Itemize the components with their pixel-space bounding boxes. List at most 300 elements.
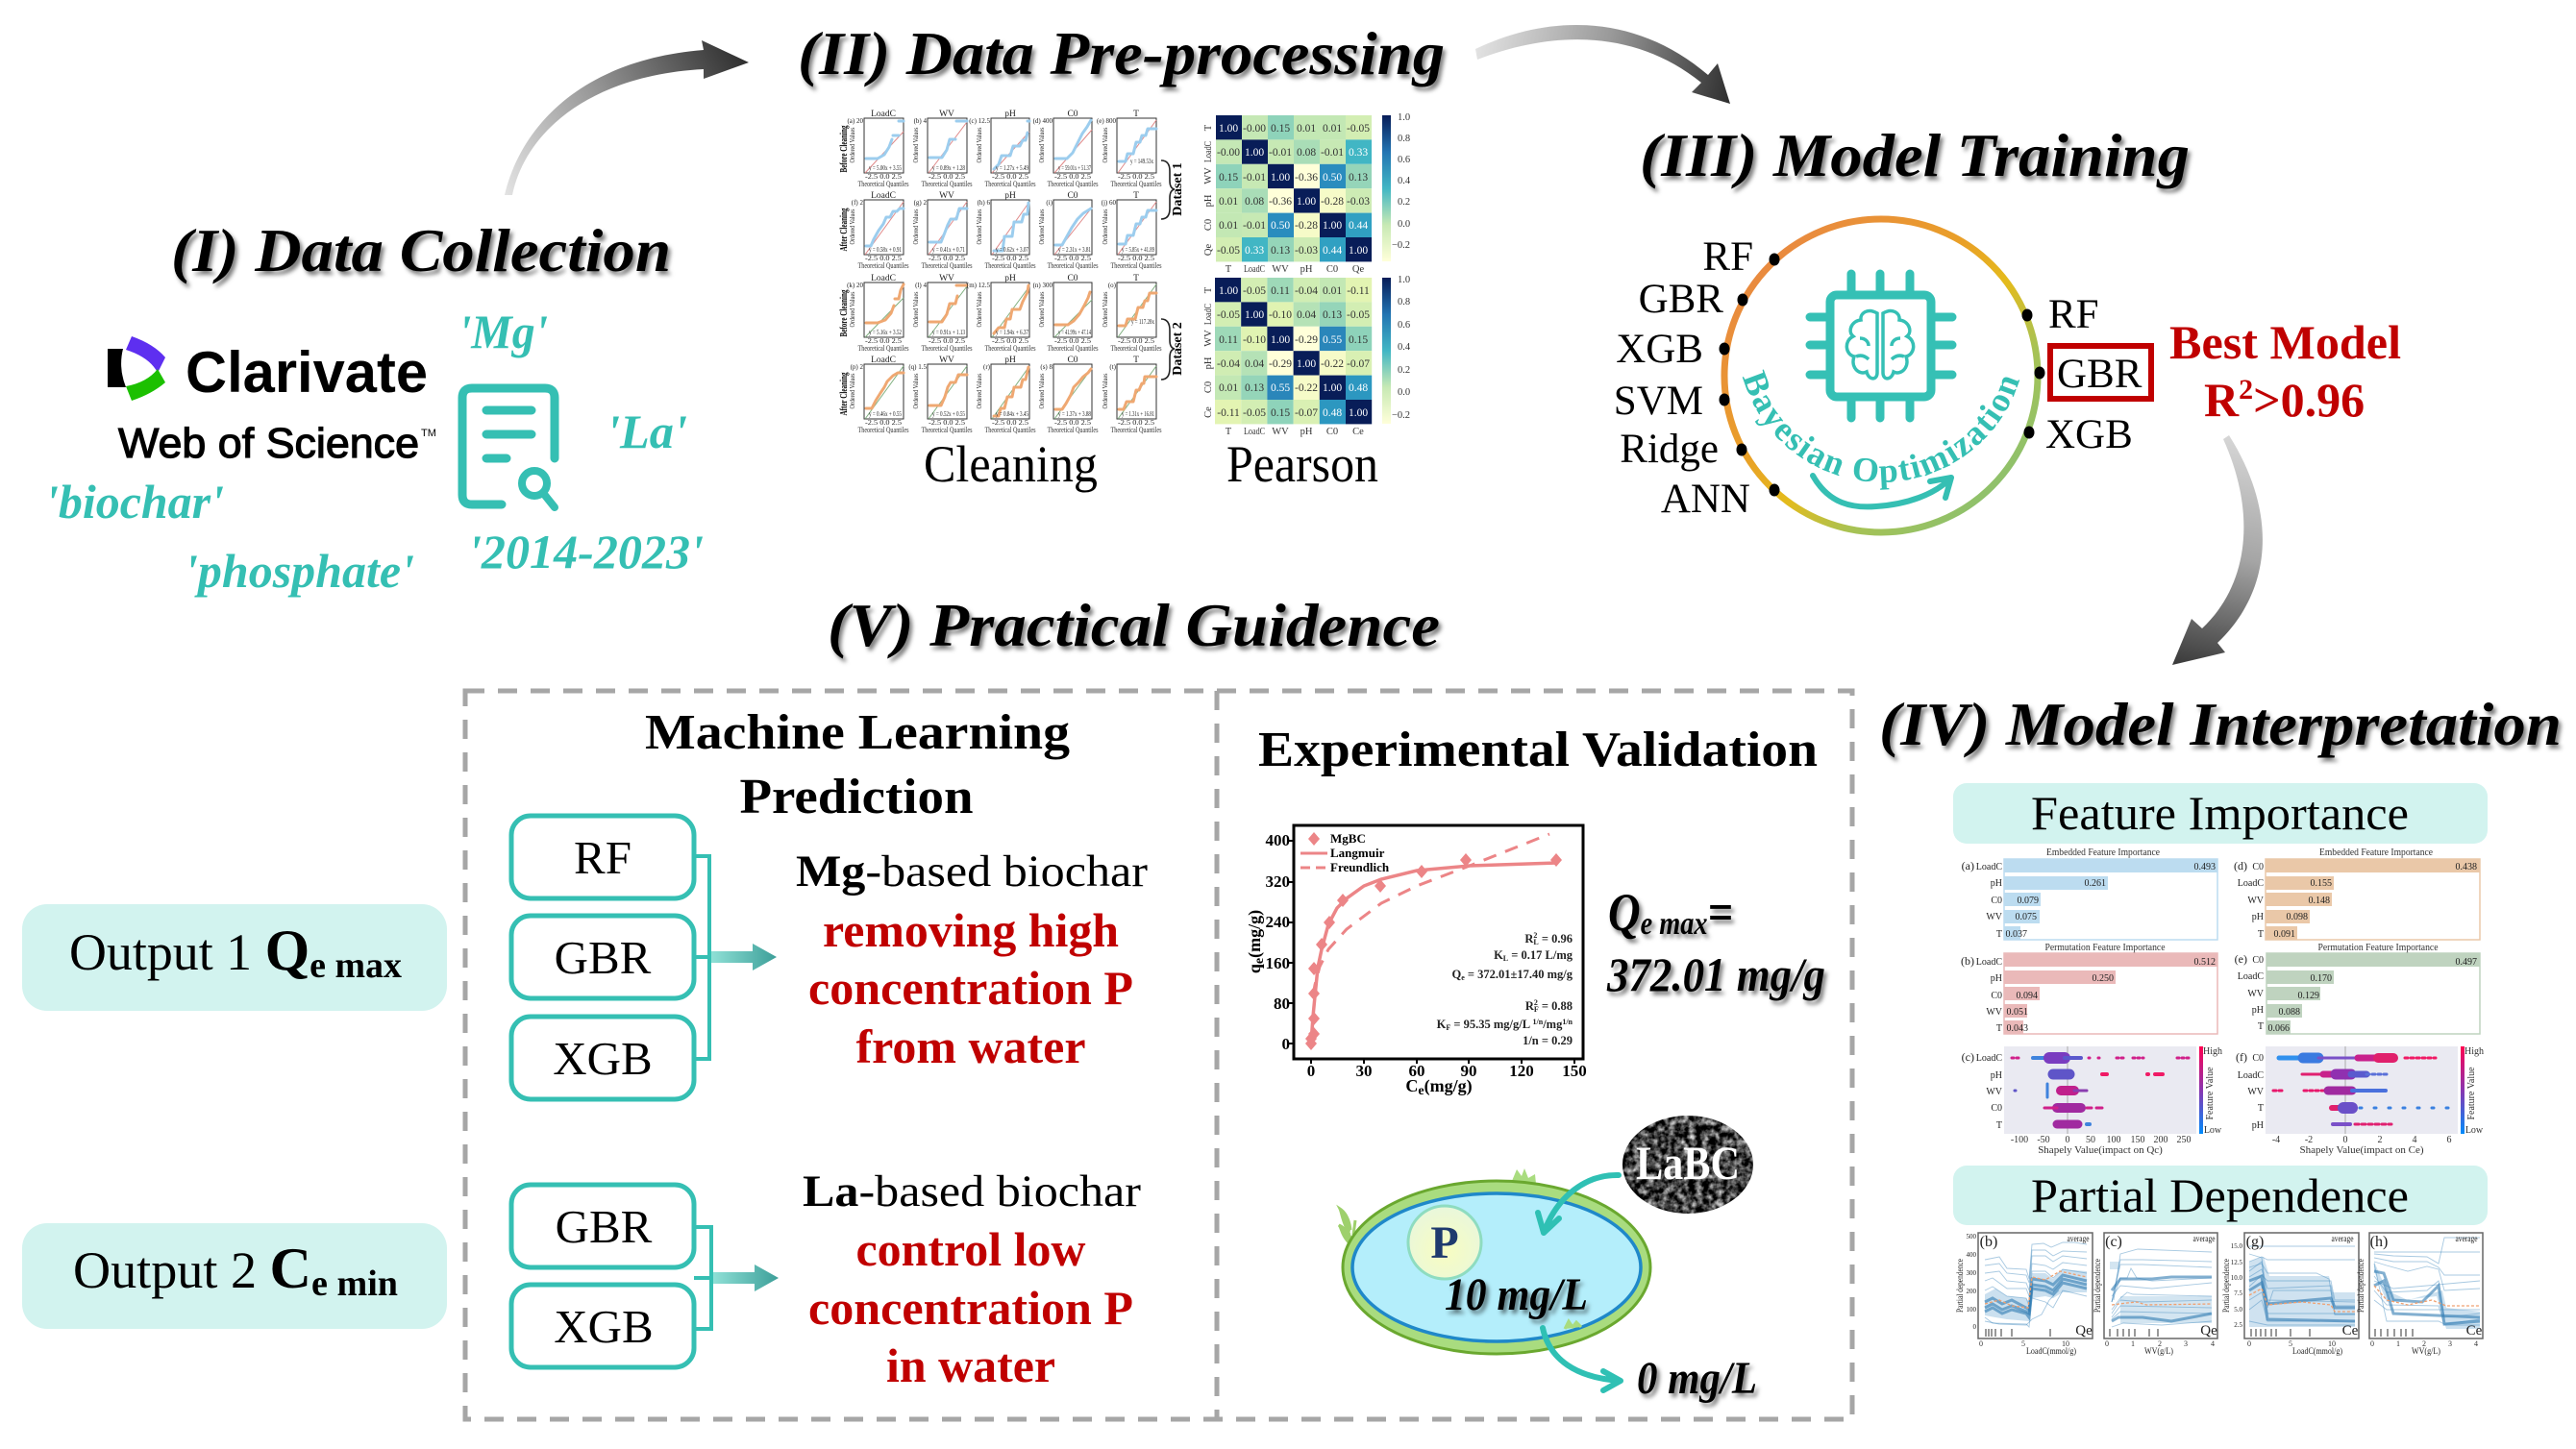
heatmap: dataset 2: -0.22 xyxy=(1321,358,1344,370)
qq plot t: -2.5 0.0 2.5 xyxy=(1118,419,1155,427)
result: La-based biochar: concentration P xyxy=(808,1281,1133,1335)
shap plot c: Shapely Value(impact on Qc) xyxy=(2038,1144,2163,1156)
heatmap: dataset 1: -0.00 xyxy=(1243,123,1266,135)
candidate models: ANN xyxy=(1661,477,1750,522)
bar chart a: embedded importance: pH xyxy=(1991,878,2002,889)
icon: AI chip brain xyxy=(1810,274,1952,418)
model box: RF: RF xyxy=(574,831,632,884)
isotherm chart: 120 xyxy=(1509,1062,1534,1080)
qq plot k: (k) 20 xyxy=(847,282,863,289)
qq plot i: Ordered Values xyxy=(1038,209,1046,244)
heatmap: dataset 2: pH xyxy=(1300,427,1313,437)
bar chart e: permutation importance: Permutation Feature Importance xyxy=(2318,943,2439,953)
heatmap: dataset 1: pH xyxy=(1300,264,1313,275)
heatmap: dataset 1: C0 xyxy=(1203,219,1214,231)
row label: after cleaning 2: After Cleaning xyxy=(839,372,850,415)
shap plot f: WV xyxy=(2247,1087,2265,1097)
qq plot j: (j) 60 xyxy=(1102,199,1116,207)
qq plot g xyxy=(912,191,973,270)
qq plot s xyxy=(1038,356,1098,434)
bar chart a: embedded importance: WV xyxy=(1986,912,2003,922)
qq plot l: y = 0.91x + 1.13 xyxy=(932,329,965,336)
banner label: feature importance: Feature Importance xyxy=(2031,786,2409,840)
qq plot r: -2.5 0.0 2.5 xyxy=(992,419,1029,427)
qq plot d xyxy=(1033,110,1098,188)
shap plot f: -2 xyxy=(2305,1135,2313,1145)
callout: Qe max value: 372.01 mg/g xyxy=(1606,947,1825,1001)
row label: before cleaning 2: Before Cleaning xyxy=(839,289,850,336)
qq plot h: (h) 6 xyxy=(978,199,990,207)
bar chart d: embedded importance: 0.098 xyxy=(2286,912,2308,922)
qq plot i: (i) xyxy=(1046,199,1053,207)
qq plot s: y = 1.37x + 3.88 xyxy=(1058,410,1091,418)
caption: cleaning: Cleaning xyxy=(924,435,1098,493)
isotherm chart: Q xyxy=(1451,968,1461,981)
qq plot g: Ordered Values xyxy=(912,209,920,244)
bar chart b: permutation importance: 0.051 xyxy=(2007,1007,2028,1018)
heatmap: dataset 1: 0.13 xyxy=(1271,245,1290,257)
selected models: XGB xyxy=(2045,412,2133,457)
qq plot p xyxy=(849,356,909,434)
connector bracket 2 xyxy=(694,1227,713,1329)
isotherm chart: 240 xyxy=(1265,913,1290,931)
qq plot g: y = 0.41x + 0.71 xyxy=(932,246,965,254)
shap plot c: T xyxy=(1996,1120,2002,1131)
heatmap: dataset 2: 1.00 xyxy=(1219,285,1238,297)
keyword: biochar: 'biochar' xyxy=(45,475,224,528)
heatmap: dataset 1: -0.28 xyxy=(1321,196,1344,208)
qq plot g: Theoretical Quantiles xyxy=(921,261,973,270)
heading: data pre-processing: (II) Data Pre-processing xyxy=(798,19,1445,87)
shap plot c: C0 xyxy=(1991,1103,2002,1114)
shap plot f: 6 xyxy=(2447,1135,2451,1145)
heading: experimental validation: Experimental Validation xyxy=(1258,723,1818,777)
heatmap: dataset 2: -0.05 xyxy=(1217,309,1240,321)
keyword: years: '2014-2023' xyxy=(468,525,704,578)
bar chart e: permutation importance: 0.129 xyxy=(2297,991,2319,1001)
heatmap: dataset 1: -0.05 xyxy=(1217,245,1240,257)
qq plot a: y = 5.00x + 3.55 xyxy=(869,164,902,172)
output box 2 xyxy=(22,1223,447,1329)
heatmap: dataset 2: 1.00 xyxy=(1323,382,1342,394)
isotherm chart: 1/n xyxy=(1562,1018,1573,1026)
shap plot c: 100 xyxy=(2107,1135,2120,1145)
heatmap: dataset 2: 0.55 xyxy=(1271,382,1290,394)
bar chart b: permutation importance: 0.094 xyxy=(2017,991,2038,1001)
heatmap: dataset 2: 0.11 xyxy=(1219,334,1238,346)
qq plot f xyxy=(849,191,909,270)
heatmap: dataset 2: 0.13 xyxy=(1245,382,1264,394)
isotherm chart: = 95.35 mg/g/L xyxy=(1450,1018,1533,1031)
isotherm chart: 60 xyxy=(1409,1062,1424,1080)
partial dependence plot c: WV(g/L) xyxy=(2144,1346,2173,1357)
qq plot h: y = 0.62x + 3.07 xyxy=(996,246,1028,254)
partial dependence plot h xyxy=(2357,1233,2483,1357)
shap plot f: 2 xyxy=(2378,1135,2382,1145)
partial dependence plot h: (h) xyxy=(2370,1234,2388,1250)
bar chart d: embedded importance: pH xyxy=(2252,912,2264,922)
qq plot i: y = 2.31x + 3.81 xyxy=(1058,246,1091,254)
isotherm chart: 2 xyxy=(1534,998,1538,1007)
qq plot h: pH xyxy=(1004,191,1016,201)
qq plot b xyxy=(912,110,973,188)
bar chart b: permutation importance: 0.512 xyxy=(2193,957,2216,968)
shap plot f: Feature Value xyxy=(2466,1067,2477,1120)
shap plot f: (f) xyxy=(2236,1050,2247,1064)
heatmap: dataset 2: pH xyxy=(1203,356,1214,369)
shap plot c: LoadC xyxy=(1976,1053,2002,1064)
qq plot q: (q) 1.5 xyxy=(908,363,927,371)
partial dependence plot c: Qe xyxy=(2200,1323,2217,1338)
bar chart a: embedded importance: Embedded Feature Importance xyxy=(2046,847,2161,858)
bar chart d: embedded importance: T xyxy=(2258,929,2264,940)
qq plot o: y = 117.28x xyxy=(1131,318,1154,326)
heatmap: dataset 2: 0.8 xyxy=(1398,297,1410,307)
bar chart e: permutation importance: T xyxy=(2258,1021,2264,1032)
bar chart e: permutation importance: 0.066 xyxy=(2268,1023,2290,1034)
isotherm chart: = 372.01±17.40 mg/g xyxy=(1465,968,1573,981)
heatmap: dataset 1: WV xyxy=(1203,167,1214,184)
qq plot n: Theoretical Quantiles xyxy=(1048,344,1099,353)
arrow: optimization direction xyxy=(1813,476,1951,506)
qq plot c xyxy=(969,110,1036,188)
qq plot l: Ordered Values xyxy=(912,291,920,327)
qq plot s: -2.5 0.0 2.5 xyxy=(1054,419,1092,427)
qq plot s: (s) 8 xyxy=(1040,363,1053,371)
isotherm chart: e xyxy=(1461,973,1465,982)
qq plot j: y = 5.85x + 41.89 xyxy=(1122,246,1154,254)
biochar sample: LaBC xyxy=(1636,1136,1740,1190)
partial dependence plot b: 10 xyxy=(2062,1339,2069,1348)
heatmap: dataset 2: -0.07 xyxy=(1347,358,1370,370)
bar chart a: embedded importance: LoadC xyxy=(1976,862,2002,872)
qq plot h: Ordered Values xyxy=(976,209,983,244)
qq plot l: Theoretical Quantiles xyxy=(921,344,973,353)
output box 1 xyxy=(22,904,447,1011)
heatmap: dataset 2: 0.55 xyxy=(1323,334,1342,346)
partial dependence plot g: 15.0 xyxy=(2231,1242,2243,1250)
shap plot c: -50 xyxy=(2037,1135,2050,1145)
callout: Qe max: = xyxy=(1707,883,1733,943)
partial dependence plot g: 5.0 xyxy=(2234,1306,2243,1314)
heatmap: dataset 1: 1.0 xyxy=(1398,112,1410,123)
isotherm chart: MgBC xyxy=(1330,831,1366,846)
model box: GBR lower xyxy=(511,1185,694,1267)
qq plot k: Theoretical Quantiles xyxy=(857,344,909,353)
bar chart e: permutation importance: 0.497 xyxy=(2455,957,2477,968)
heatmap: dataset 1: 0.33 xyxy=(1349,147,1368,159)
bar chart b: permutation importance: T xyxy=(1996,1023,2002,1034)
partial dependence plot c xyxy=(2093,1233,2217,1357)
shap plot c: 0 xyxy=(2065,1135,2070,1145)
heatmap: dataset 1: 0.50 xyxy=(1271,220,1290,232)
qq plot c: Ordered Values xyxy=(976,127,983,163)
qq plot f: Theoretical Quantiles xyxy=(857,261,909,270)
heatmap: dataset 1: C0 xyxy=(1326,264,1338,275)
isotherm chart: C xyxy=(1405,1076,1418,1095)
partial dependence plot h: Partial dependence xyxy=(2357,1259,2366,1313)
qq plot g: (g) 2 xyxy=(914,199,927,207)
qq plot p: y = 0.46x + 0.55 xyxy=(869,410,902,418)
panel: model training xyxy=(1614,215,2401,536)
heatmap: dataset 2: -0.10 xyxy=(1243,334,1266,346)
bar chart d: embedded importance: (d) xyxy=(2234,859,2247,872)
label: dataset 2: Dataset 2 xyxy=(1171,322,1185,376)
shap plot c: High xyxy=(2203,1046,2222,1057)
partial dependence plot h: average xyxy=(2455,1235,2478,1244)
isotherm chart: 150 xyxy=(1562,1062,1587,1080)
qq plot b: WV xyxy=(939,110,954,119)
callout: Qe max: e max xyxy=(1641,906,1707,942)
isotherm chart xyxy=(1245,825,1587,1098)
heatmap: dataset 2: −0.2 xyxy=(1392,410,1410,421)
arrow: pre-processing to model training xyxy=(1475,25,1730,104)
heatmap: dataset 2: 0.48 xyxy=(1323,407,1342,419)
heatmap: dataset 1: 1.00 xyxy=(1219,123,1238,135)
heatmap: dataset 2: -0.29 xyxy=(1269,358,1292,370)
heatmap: dataset 2: 0.0 xyxy=(1398,387,1410,398)
shap plot c: 200 xyxy=(2153,1135,2168,1145)
ring nodes xyxy=(1719,254,2045,496)
qq plot n: Ordered Values xyxy=(1038,291,1046,327)
heatmap: dataset 2: -0.10 xyxy=(1269,309,1292,321)
isotherm chart: /mg xyxy=(1542,1018,1563,1031)
heatmap: dataset 1: 0.8 xyxy=(1398,134,1410,144)
model box: XGB: XGB xyxy=(553,1032,653,1085)
qq plot n: C0 xyxy=(1067,274,1078,283)
panel: machine learning prediction xyxy=(511,705,1148,1392)
heatmap: dataset 2: 0.13 xyxy=(1323,309,1342,321)
result: La-based biochar: control low xyxy=(855,1222,1086,1276)
heatmap: dataset 1: 0.2 xyxy=(1398,197,1410,208)
isotherm chart: L xyxy=(1503,954,1508,963)
bar chart b: permutation importance xyxy=(1961,943,2217,1034)
bar chart e: permutation importance: pH xyxy=(2252,1005,2264,1016)
qq plot r: Theoretical Quantiles xyxy=(984,426,1036,434)
qq plot q: Theoretical Quantiles xyxy=(921,426,973,434)
partial dependence plot g: 10.0 xyxy=(2231,1274,2243,1282)
panel: QQ plots for data cleaning xyxy=(839,110,1161,493)
partial dependence plot b: Qe xyxy=(2075,1323,2093,1338)
heatmap: dataset 1: -0.05 xyxy=(1347,123,1370,135)
heatmap: dataset 1: 1.00 xyxy=(1245,147,1264,159)
qq plot o: Ordered Values xyxy=(1102,291,1109,327)
isotherm chart: (mg/g) xyxy=(1424,1076,1473,1096)
partial dependence plot h: WV(g/L) xyxy=(2412,1346,2440,1357)
shap plot f: 4 xyxy=(2413,1135,2416,1145)
qq plot j: -2.5 0.0 2.5 xyxy=(1118,255,1155,262)
partial dependence plot h: 0 xyxy=(2370,1339,2374,1348)
heatmap: dataset 1: 0.08 xyxy=(1297,147,1316,159)
heatmap: dataset 1: 0.13 xyxy=(1349,172,1368,184)
qq plot d: C0 xyxy=(1067,110,1078,119)
bar chart a: embedded importance: 0.261 xyxy=(2084,878,2106,889)
qq plot p: Theoretical Quantiles xyxy=(857,426,909,434)
shap plot c: Feature Value xyxy=(2205,1067,2216,1120)
qq plot q: WV xyxy=(939,356,954,365)
qq plot i xyxy=(1038,191,1098,270)
partial dependence plot b: LoadC(mmol/g) xyxy=(2026,1346,2076,1357)
r squared label: >0.96 xyxy=(2253,373,2365,427)
heatmap: dataset 1: 0.44 xyxy=(1323,245,1342,257)
qq plot p: -2.5 0.0 2.5 xyxy=(865,419,903,427)
keyword: Mg: 'Mg' xyxy=(458,305,548,358)
heatmap: dataset 1: -0.01 xyxy=(1321,147,1344,159)
qq plot t xyxy=(1102,356,1161,434)
gradient ring xyxy=(1724,219,2038,532)
qq plot t: y = 1.31x + 16.81 xyxy=(1122,410,1154,418)
heatmap: dataset 1: -0.03 xyxy=(1347,196,1370,208)
candidate models: GBR xyxy=(1639,277,1723,322)
heatmap: dataset 1: 0.15 xyxy=(1219,172,1238,184)
trademark: TM xyxy=(421,428,436,439)
partial dependence plot g: 7.5 xyxy=(2234,1289,2243,1297)
curved label: bayesian optimization: Bayesian Optimization xyxy=(1742,369,2020,490)
qq plot e: y = 149.53x xyxy=(1130,158,1153,165)
heatmap: dataset 1: 0.01 xyxy=(1219,220,1238,232)
isotherm chart: 320 xyxy=(1265,872,1290,891)
heatmap: dataset 2: Ce xyxy=(1352,427,1364,437)
shap plot c xyxy=(1962,1046,2222,1156)
web of science wordmark: Web of Science xyxy=(118,420,419,467)
dashed container: practical guidance xyxy=(465,691,1852,1419)
shap plot c: 250 xyxy=(2176,1135,2192,1145)
arrow to Mg result xyxy=(711,944,777,970)
partial dependence plot c: 0 xyxy=(2105,1339,2109,1348)
keyword: La: 'La' xyxy=(607,405,687,458)
candidate models: Ridge xyxy=(1620,427,1719,472)
heatmap: dataset 1: 0.01 xyxy=(1323,123,1342,135)
qq plot p: (p) 2 xyxy=(851,363,863,371)
qq plot m: -2.5 0.0 2.5 xyxy=(992,337,1029,345)
r squared label: 2 xyxy=(2239,374,2253,405)
best model highlight box xyxy=(2050,346,2151,399)
output box 1: Output 1 Q xyxy=(69,919,310,982)
qq plot e: Ordered Values xyxy=(1102,127,1109,163)
qq plot j xyxy=(1102,191,1161,270)
qq plot a: LoadC xyxy=(871,110,896,119)
heatmap: dataset 2: 0.48 xyxy=(1349,382,1368,394)
qq plot m: y = 1.94x + 6.37 xyxy=(996,329,1028,336)
output box 2: Output 2 C xyxy=(73,1237,311,1300)
partial dependence plot b: 500 xyxy=(1967,1233,1976,1240)
panel: pearson heatmaps xyxy=(1161,112,1411,493)
qq plot q: -2.5 0.0 2.5 xyxy=(929,419,966,427)
qq plot c: -2.5 0.0 2.5 xyxy=(992,173,1029,181)
qq plot e: T xyxy=(1133,110,1139,119)
partial dependence plot h: 4 xyxy=(2474,1339,2478,1348)
heading: practical guidence: (V) Practical Guidence xyxy=(828,591,1440,659)
partial dependence plot h: 3 xyxy=(2448,1339,2452,1348)
qq plot a: -2.5 0.0 2.5 xyxy=(865,173,903,181)
heatmap: dataset 2: -0.04 xyxy=(1295,285,1318,297)
qq plot o xyxy=(1102,274,1161,353)
banner: feature importance xyxy=(1953,783,2488,844)
partial dependence plot g: LoadC(mmol/g) xyxy=(2292,1346,2342,1357)
heatmap: dataset 2: 1.00 xyxy=(1297,358,1316,370)
heatmap: dataset 1: 1.00 xyxy=(1349,245,1368,257)
row label: before cleaning 1: Before Cleaning xyxy=(839,125,850,173)
qq plot i: Theoretical Quantiles xyxy=(1048,261,1099,270)
partial dependence plot b: 5 xyxy=(2021,1339,2025,1348)
partial dependence plot g: average xyxy=(2332,1235,2353,1244)
bar chart e: permutation importance: WV xyxy=(2247,989,2265,999)
qq plot a: Ordered Values xyxy=(849,127,856,163)
heatmap: dataset 1 xyxy=(1203,112,1411,275)
candidate models xyxy=(1614,234,1753,522)
result: La-based biochar: in water xyxy=(886,1338,1055,1392)
heatmap: dataset 1: T xyxy=(1226,264,1232,275)
heading: model training: (III) Model Training xyxy=(1640,121,2190,189)
heatmap: dataset 1: -0.28 xyxy=(1295,220,1318,232)
qq plot d: Ordered Values xyxy=(1038,127,1046,163)
candidate models: RF xyxy=(1702,234,1753,280)
partial dependence plot g: 0 xyxy=(2247,1339,2251,1348)
bar chart d: embedded importance: Embedded Feature Importance xyxy=(2319,847,2434,858)
heatmap: dataset 2: 0.15 xyxy=(1271,407,1290,419)
bar chart d: embedded importance: 0.438 xyxy=(2455,862,2477,872)
partial dependence plot b: 100 xyxy=(1967,1306,1976,1314)
qq plot m: (m) 12.5 xyxy=(967,282,990,289)
qq plot f: y = 0.58x + 0.91 xyxy=(869,246,902,254)
heatmap: dataset 1: 1.00 xyxy=(1297,196,1316,208)
qq plot q xyxy=(908,356,973,434)
qq plot d: Theoretical Quantiles xyxy=(1048,180,1099,188)
heatmap: dataset 2: C0 xyxy=(1326,427,1338,437)
qq plot f: -2.5 0.0 2.5 xyxy=(865,255,903,262)
bar chart b: permutation importance: pH xyxy=(1991,973,2002,984)
bar chart a: embedded importance: 0.037 xyxy=(2005,929,2027,940)
heatmap: dataset 2: WV xyxy=(1272,427,1289,437)
row label: after cleaning 1: After Cleaning xyxy=(839,208,850,252)
isotherm chart: = 0.17 L/mg xyxy=(1508,948,1573,962)
best model label: Best Model xyxy=(2169,315,2401,369)
qq plot s: C0 xyxy=(1067,356,1078,365)
brace: dataset 2 xyxy=(1161,319,1175,380)
partial dependence plot b: 0 xyxy=(1972,1323,1976,1331)
qq plot d: y = 59.01x + 51.37 xyxy=(1058,164,1091,172)
bar chart e: permutation importance: LoadC xyxy=(2238,971,2264,982)
heatmap: dataset 1: -0.00 xyxy=(1217,147,1240,159)
qq plot g: WV xyxy=(939,191,954,201)
heatmap: dataset 2: LoadC xyxy=(1244,427,1265,437)
heatmap: dataset 2: -0.05 xyxy=(1347,309,1370,321)
qq plot d: (d) 400 xyxy=(1033,117,1053,125)
heatmap: dataset 1: 0.33 xyxy=(1245,245,1264,257)
qq plot m: pH xyxy=(1004,274,1016,283)
isotherm chart: R xyxy=(1525,999,1534,1013)
heatmap: dataset 2: -0.29 xyxy=(1295,334,1318,346)
bar chart d: embedded importance: WV xyxy=(2247,896,2265,906)
pond illustration xyxy=(1339,1168,1650,1354)
qq plot e: (e) 800 xyxy=(1097,117,1116,125)
label: 0 mg/L: 0 mg/L xyxy=(1637,1353,1757,1404)
heatmap: dataset 2: 0.4 xyxy=(1398,342,1411,353)
heatmap: dataset 2: 1.0 xyxy=(1398,275,1410,285)
qq plot l: -2.5 0.0 2.5 xyxy=(929,337,966,345)
heatmap: dataset 2: 0.04 xyxy=(1245,358,1264,370)
heatmap: dataset 2 xyxy=(1203,275,1411,437)
heatmap: dataset 2: 1.00 xyxy=(1349,407,1368,419)
bar chart a: embedded importance: (a) xyxy=(1962,859,1974,872)
qq plot k: Ordered Values xyxy=(849,291,856,327)
qq plot t: Theoretical Quantiles xyxy=(1111,426,1162,434)
bar chart a: embedded importance xyxy=(1962,847,2217,940)
heatmap: dataset 2: T xyxy=(1226,427,1232,437)
isotherm chart: Langmuir xyxy=(1330,846,1385,860)
bar chart b: permutation importance: C0 xyxy=(1991,991,2002,1001)
shap plot f: Low xyxy=(2465,1125,2484,1136)
